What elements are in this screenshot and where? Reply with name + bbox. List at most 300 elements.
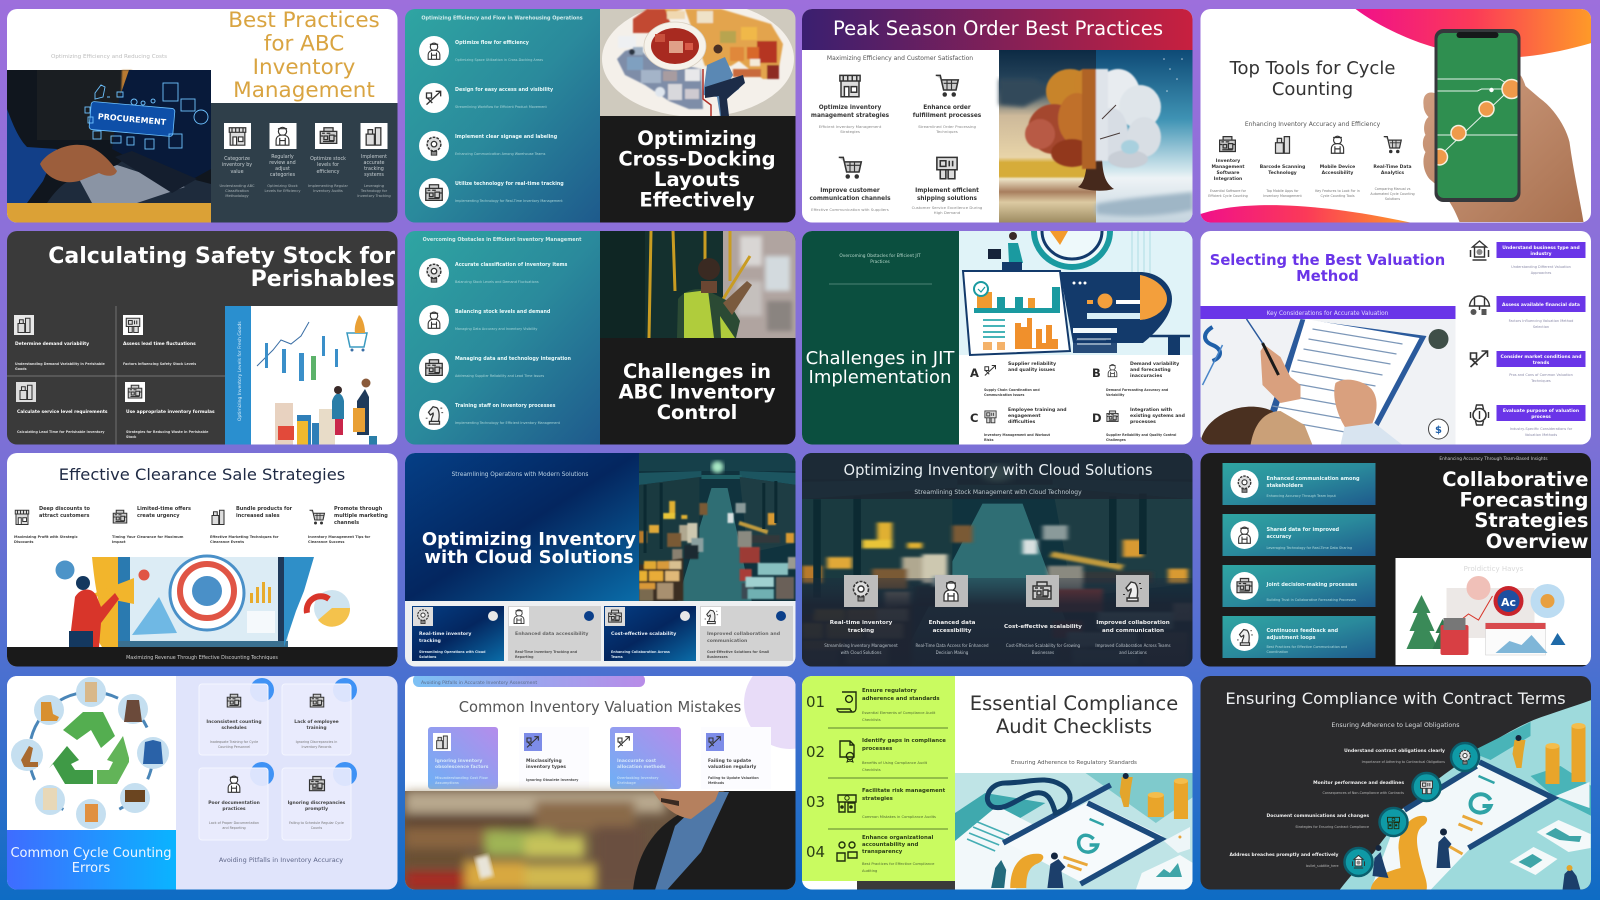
grid of four practices: Strategies bbox=[840, 129, 860, 134]
lime panel: Common Mistakes in Compliance Audits bbox=[862, 815, 936, 819]
photo: procurement laptop bbox=[7, 70, 211, 203]
list: four considerations: Valuation Methods bbox=[1525, 433, 1557, 437]
tools row bbox=[1208, 136, 1415, 201]
cards: four mistakes: Misclassifying bbox=[526, 758, 562, 764]
row of four strategies: Clearance Success bbox=[308, 540, 344, 544]
list: A B C D obstacles: Supplier reliability bbox=[1008, 361, 1056, 367]
panel: four practices bbox=[211, 103, 398, 223]
title: Top Tools for Cycle bbox=[1229, 58, 1395, 79]
illustration: forecasting bbox=[1396, 558, 1592, 665]
slide: Calculating Safety Stock for Perishables bbox=[7, 231, 398, 445]
cards: four mistakes: valuation regularly bbox=[708, 764, 756, 770]
tools row: Top Mobile Apps for bbox=[1265, 189, 1299, 193]
four benefit columns: accessibility bbox=[933, 628, 972, 634]
cards: four errors: promptly bbox=[305, 806, 328, 812]
illustration: marketing target bbox=[56, 556, 350, 647]
panel: title: Effectively bbox=[639, 188, 755, 212]
lime panel bbox=[802, 676, 955, 890]
photo: warehouse background bbox=[802, 453, 1193, 667]
row of four strategies bbox=[14, 506, 388, 544]
cards: four benefits: Improved collaboration and bbox=[707, 631, 780, 637]
list: four collaboration items: adjustment loops bbox=[1266, 635, 1316, 641]
list: A B C D obstacles: and forecasting bbox=[1130, 367, 1171, 373]
footer band bbox=[7, 647, 398, 667]
subtitle: Ensuring Adherence to Legal Obligations bbox=[1331, 722, 1460, 729]
panel: four practices: Optimize stock bbox=[310, 156, 346, 162]
slide: Essential Compliance Audit Checklists bbox=[802, 676, 1193, 890]
row of four strategies: increased sales bbox=[236, 513, 280, 519]
heading strip: Optimizing Efficiency and Flow in Warehousing Operations bbox=[421, 16, 583, 22]
list: four steps: Enhancing Communication Among Warehouse Teams bbox=[455, 152, 546, 156]
illustration: isometric curve bbox=[1340, 700, 1592, 890]
tools row: Barcode Scanning bbox=[1260, 164, 1305, 170]
list: four considerations: Selection bbox=[1533, 325, 1549, 329]
subtitle: Enhancing Accuracy Through Team-Based Insights bbox=[1439, 456, 1548, 462]
four benefit columns: Real-time inventory bbox=[830, 620, 893, 626]
grid lines and four cells: Goods bbox=[15, 367, 27, 371]
grid of four practices: shipping solutions bbox=[917, 196, 978, 202]
grid lines and four cells bbox=[7, 306, 226, 445]
tools row: Technology bbox=[1268, 170, 1297, 176]
top shade band bbox=[802, 453, 1193, 499]
panel: four practices: accurate bbox=[364, 160, 385, 166]
cards: four mistakes: allocation methods bbox=[617, 764, 666, 770]
cards: four mistakes: Methods bbox=[708, 781, 724, 785]
list: four contract steps: Understand contract obligations clearly bbox=[1344, 748, 1445, 754]
grid lines and four cells: Determine demand variability bbox=[15, 341, 89, 347]
panel: four practices: Classification bbox=[225, 189, 249, 193]
four benefit columns: and Locations bbox=[1119, 650, 1147, 655]
slide: Effective Clearance Sale Strategies bbox=[7, 453, 398, 667]
panel: four practices: tracking bbox=[364, 166, 384, 172]
panel: four practices: Categorize bbox=[224, 156, 250, 162]
cards: four mistakes: Misunderstanding Cost Flow bbox=[435, 776, 488, 780]
list: four steps: Implement clear signage and labeling bbox=[455, 134, 558, 140]
title: Ensuring Compliance with Contract Terms bbox=[1225, 689, 1566, 708]
phone with chart bbox=[1432, 29, 1521, 202]
list: four obstacles: Managing data and technology integration bbox=[455, 356, 571, 362]
title: Essential Compliance bbox=[970, 692, 1178, 715]
cards: four mistakes: Assumptions bbox=[435, 781, 459, 785]
list: four considerations: Factors Influencing Valuation Method bbox=[1509, 319, 1573, 323]
photo: four seasons tree bbox=[999, 50, 1193, 223]
title: Strategies bbox=[1474, 509, 1588, 532]
title: Counting bbox=[1272, 79, 1353, 100]
list: A B C D obstacles: D bbox=[1092, 411, 1102, 425]
header band bbox=[802, 9, 1193, 50]
grid of four practices bbox=[809, 75, 983, 215]
lime panel: Best Practices for Effective Compliance bbox=[862, 862, 935, 866]
cards: four errors: practices bbox=[222, 806, 246, 812]
swoosh top bbox=[1356, 9, 1592, 58]
grid of four practices: communication channels bbox=[809, 196, 891, 202]
title: Audit Checklists bbox=[996, 715, 1152, 738]
title: Calculating Safety Stock for bbox=[48, 244, 395, 269]
title: Management bbox=[233, 78, 375, 103]
list: four contract steps: Document communications and changes bbox=[1267, 813, 1369, 819]
list: four collaboration items: Coordination bbox=[1266, 650, 1288, 654]
four benefit columns: Streamlining Inventory Management bbox=[824, 643, 898, 648]
header band: Peak Season Order Best Practices bbox=[833, 17, 1163, 40]
cards: four benefits: Teams bbox=[611, 655, 623, 659]
list: A B C D obstacles: Demand variability bbox=[1130, 361, 1179, 367]
list: four contract steps: Monitor performance and deadlines bbox=[1313, 780, 1404, 786]
list: four steps: Streamlining Workflow for Efficient Product Movement bbox=[455, 105, 547, 109]
list: A B C D obstacles: difficulties bbox=[1008, 419, 1035, 425]
title: Method bbox=[1296, 268, 1359, 285]
list: A B C D obstacles: Demand Forecasting Accuracy and bbox=[1106, 388, 1169, 392]
amber base bar bbox=[7, 203, 211, 223]
grid of four practices: Streamlined Order Processing bbox=[918, 124, 976, 129]
cards: four errors: and Reporting bbox=[222, 826, 246, 830]
green side panel: Overcoming Obstacles for Efficient JIT bbox=[839, 253, 921, 259]
panel: four practices: Inventory Audits bbox=[313, 189, 343, 193]
panel: title: Layouts bbox=[654, 168, 740, 191]
lime panel: 03 bbox=[806, 793, 825, 811]
list: A B C D obstacles: C bbox=[970, 411, 978, 425]
list: four obstacles: Balancing stock levels and demand bbox=[455, 309, 551, 315]
grid of four practices: High Demand bbox=[934, 210, 961, 215]
list: four considerations: Industry-Specific Considerations for bbox=[1510, 427, 1573, 431]
list: four steps: Optimize flow for efficiency bbox=[455, 40, 530, 46]
grid of four practices: management strategies bbox=[811, 113, 890, 119]
list: four contract steps: bullet_subtitle_here bbox=[1306, 864, 1338, 868]
photo: signing document bbox=[1200, 319, 1456, 445]
illustration: recycling ring bbox=[7, 676, 176, 830]
cards: four errors bbox=[199, 684, 351, 840]
tools row: Analytics bbox=[1381, 170, 1404, 176]
list: A B C D obstacles: B bbox=[1092, 366, 1101, 380]
slide: Challenges in JIT Implementation bbox=[802, 231, 1193, 445]
cards: four errors: Failing to Schedule Regular Cycle bbox=[289, 821, 344, 825]
corner circle bbox=[744, 657, 836, 749]
lime panel: processes bbox=[862, 746, 892, 752]
green side panel: Challenges in JIT bbox=[806, 348, 955, 369]
list: four obstacles: Managing Data Accuracy and Inventory Visibility bbox=[455, 327, 537, 331]
tools row: Key Features to Look For in bbox=[1315, 189, 1360, 193]
list: four obstacles: Accurate classification of inventory items bbox=[455, 262, 568, 268]
list: four collaboration items: Enhanced communication among bbox=[1266, 476, 1360, 482]
grid of four practices: Customer Service Excellence During bbox=[912, 205, 983, 210]
title: Inventory bbox=[253, 55, 356, 80]
grid of four practices: Improve customer bbox=[820, 188, 880, 194]
panel: four practices: Leveraging bbox=[364, 184, 384, 188]
photo: warehouse aisle bbox=[639, 453, 796, 601]
green side panel bbox=[802, 231, 959, 445]
list: A B C D obstacles: existing systems and bbox=[1130, 413, 1185, 419]
four benefit columns: Enhanced data bbox=[929, 620, 976, 626]
grid of four practices: Techniques bbox=[935, 129, 958, 134]
list: four collaboration items: Enhancing Accuracy Through Team Input bbox=[1266, 494, 1337, 498]
cards: four benefits: Businesses bbox=[707, 655, 728, 659]
cards: four benefits: Real-time inventory bbox=[419, 631, 471, 637]
hero gradient with title bbox=[405, 453, 639, 601]
grid of four practices: Enhance order bbox=[923, 105, 971, 111]
panel: title: Challenges in bbox=[623, 360, 771, 383]
subtitle: Ensuring Adherence to Regulatory Standards bbox=[1011, 760, 1137, 766]
title: Optimizing Inventory with Cloud Solutions bbox=[844, 462, 1152, 479]
hero gradient with title: with Cloud Solutions bbox=[424, 547, 634, 568]
title: Overview bbox=[1486, 530, 1588, 553]
lime panel: Checklists bbox=[862, 768, 881, 772]
cards: four errors: training bbox=[306, 725, 327, 731]
tools row: Solutions bbox=[1385, 197, 1400, 201]
subtitle: Streamlining Stock Management with Cloud Technology bbox=[914, 489, 1082, 496]
four benefit columns bbox=[824, 575, 1171, 655]
four benefit columns: Improved Collaboration Across Teams bbox=[1095, 643, 1171, 648]
row of four strategies: Effective Marketing Techniques for bbox=[210, 535, 279, 539]
cards: four mistakes: Shrinkage bbox=[617, 781, 637, 785]
lime panel: Essential Elements of Compliance Audit bbox=[862, 711, 936, 715]
green side panel: Implementation bbox=[809, 367, 951, 388]
list: A B C D obstacles: Communication Issues bbox=[984, 393, 1024, 397]
cards: four benefits: Enhancing Collaboration Across bbox=[611, 650, 670, 654]
list: four considerations: Techniques bbox=[1530, 379, 1551, 383]
tools row: Cycle Counting Tools bbox=[1320, 194, 1355, 198]
lime panel: Facilitate risk management bbox=[862, 788, 946, 794]
cards: four mistakes: Failing to Update Valuation bbox=[708, 776, 759, 780]
title: Selecting the Best Valuation bbox=[1210, 252, 1445, 269]
panel: four practices: Levels for Efficiency bbox=[265, 189, 301, 193]
row of four strategies: attract customers bbox=[39, 513, 89, 519]
cards: four errors: Lack of employee bbox=[294, 719, 339, 725]
cards: four benefits: tracking bbox=[419, 638, 441, 644]
list: four collaboration items: Leveraging Technology for Real-Time Data Sharing bbox=[1266, 546, 1352, 550]
list: four steps: Implementing Technology for Real-Time Inventory Management bbox=[455, 199, 563, 203]
lime panel: Identify gaps in compliance bbox=[862, 738, 946, 744]
hero gradient with title: Optimizing Inventory bbox=[422, 529, 636, 550]
cards: four mistakes: Failing to update bbox=[708, 758, 751, 764]
lime panel: accountability and bbox=[862, 842, 918, 848]
photo: warehouse worker bbox=[600, 231, 796, 338]
pill label bbox=[413, 674, 645, 687]
title: Effective Clearance Sale Strategies bbox=[59, 465, 345, 484]
tools row: Inventory Management bbox=[1263, 194, 1302, 198]
panel: four practices: Understanding ABC bbox=[220, 184, 255, 188]
list: A B C D obstacles: Supplier Reliability and Quality Control bbox=[1106, 433, 1176, 437]
grid of four practices: Effective Communication with Suppliers bbox=[811, 207, 889, 212]
cards: four benefits: communication bbox=[707, 638, 747, 644]
grid of four practices: fulfillment processes bbox=[913, 113, 982, 119]
row of four strategies: Promote through bbox=[334, 506, 383, 512]
heading strip: Overcoming Obstacles in Efficient Inventory Management bbox=[423, 237, 582, 243]
tools row: Integration bbox=[1214, 176, 1242, 182]
panel: four practices: Implement bbox=[361, 154, 387, 160]
tools row: Real-Time Data bbox=[1373, 164, 1412, 170]
list: four collaboration items: Continuous feedback and bbox=[1266, 628, 1339, 634]
four benefit columns: Real-Time Data Access for Enhanced bbox=[915, 643, 989, 648]
list: four considerations: trends bbox=[1533, 360, 1550, 366]
slide: Ensuring Compliance with Contract Terms bbox=[1200, 676, 1592, 890]
photo: plate of blocks bbox=[600, 1, 796, 117]
row of four strategies: Timing Your Clearance for Maximum bbox=[112, 535, 184, 539]
panel: four practices: Regularly bbox=[271, 154, 294, 160]
list: four obstacles bbox=[419, 258, 571, 430]
illustration: dashboard bbox=[959, 231, 1193, 355]
blue strip with vertical label: Optimizing Inventory Levels for Fresh Goods bbox=[237, 321, 243, 421]
list: four steps bbox=[419, 36, 564, 208]
row of four strategies: Discounts bbox=[14, 540, 33, 544]
list: four collaboration items bbox=[1222, 463, 1376, 658]
title: Common Inventory Valuation Mistakes bbox=[459, 699, 741, 716]
tools row: Comparing Manual vs bbox=[1375, 187, 1411, 191]
bottom shade band bbox=[802, 578, 1193, 667]
list: four steps: Utilize technology for real-time tracking bbox=[455, 181, 564, 187]
cards: four benefits: Reporting bbox=[515, 655, 534, 659]
list: four considerations: Consider market conditions and bbox=[1501, 354, 1581, 360]
list: four obstacles: Implementing Technology for Efficient Inventory Management bbox=[455, 421, 561, 425]
lime panel: 02 bbox=[806, 743, 825, 761]
cards: four mistakes: obsolescence factors bbox=[435, 764, 489, 770]
illustration: grocery chart bbox=[251, 306, 398, 445]
grid lines and four cells: Strategies for Reducing Waste in Perishable bbox=[126, 430, 209, 434]
list: four contract steps: Strategies for Ensuring Contract Compliance bbox=[1295, 825, 1369, 829]
grid of four practices: Efficient Inventory Management bbox=[819, 124, 882, 129]
cards: four mistakes bbox=[428, 727, 771, 789]
cards: four benefits: Streamlining Operations with Cloud bbox=[419, 650, 486, 654]
cards: four errors: Inadequate Training for Cycle bbox=[210, 740, 258, 744]
list: four collaboration items: Joint decision-making processes bbox=[1266, 582, 1357, 588]
illustration: forecasting: Ac bbox=[1501, 596, 1516, 609]
tools row: Mobile Device bbox=[1320, 164, 1355, 170]
title: Collaborative bbox=[1442, 468, 1588, 491]
list: A B C D obstacles: Variability bbox=[1106, 393, 1125, 397]
subtitle: Optimizing Efficiency and Reducing Costs bbox=[51, 54, 167, 60]
list: four contract steps: Address breaches promptly and effectively bbox=[1229, 852, 1339, 858]
illustration: forecasting: Proldicticy Havys bbox=[1464, 565, 1524, 573]
panel: title: Common Cycle Counting bbox=[10, 846, 172, 861]
panel: four practices: review and bbox=[269, 160, 296, 166]
list: A B C D obstacles: Integration with bbox=[1130, 407, 1172, 413]
title: for ABC bbox=[264, 32, 344, 56]
panel: four practices: value bbox=[230, 169, 244, 175]
cards: four benefits: Cost-effective scalability bbox=[611, 631, 676, 637]
list: A B C D obstacles: inaccuracies bbox=[1130, 373, 1162, 379]
lime panel: Checklists bbox=[862, 718, 881, 722]
grid lines and four cells: Assess lead time fluctuations bbox=[123, 341, 196, 347]
lime panel: Ensure regulatory bbox=[862, 688, 917, 694]
list: A B C D obstacles: Inventory Management and Workout bbox=[984, 433, 1050, 437]
panel: title: ABC Inventory bbox=[618, 380, 776, 404]
panel: title: Control bbox=[657, 401, 737, 424]
cards: four errors: Inconsistent counting bbox=[206, 719, 262, 725]
cards: four errors: Ignoring discrepancies bbox=[288, 800, 346, 806]
cards: four mistakes: Inaccurate cost bbox=[617, 758, 657, 764]
row of four strategies: Deep discounts to bbox=[39, 506, 91, 512]
pill label: Avoiding Pitfalls in Accurate Inventory Assessment bbox=[421, 680, 537, 686]
photo: procurement laptop: PROCUREMENT bbox=[97, 112, 167, 127]
list: four considerations: Assess available financial data bbox=[1502, 302, 1580, 308]
lime panel: 04 bbox=[806, 843, 825, 861]
list: four steps: Optimizing Space Utilization in Cross-Docking Areas bbox=[455, 58, 543, 62]
row of four strategies: Impact bbox=[112, 540, 126, 544]
cards: four benefits bbox=[412, 606, 793, 661]
list: A B C D obstacles: Supply Chain Coordination and bbox=[984, 388, 1040, 392]
cards: four mistakes: Ignoring Obsolete Inventory bbox=[526, 778, 579, 782]
green side panel: Practices bbox=[870, 259, 890, 265]
four benefit columns: with Cloud Solutions bbox=[841, 650, 881, 655]
footer band: Maximizing Revenue Through Effective Discounting Techniques bbox=[126, 655, 278, 661]
panel: four practices: inventory by bbox=[222, 162, 252, 168]
lime panel: transparency bbox=[862, 849, 903, 855]
cards: four benefits: Enhanced data accessibility bbox=[515, 631, 588, 637]
list: four contract steps: Consequences of Non-Compliance with Contracts bbox=[1323, 791, 1404, 795]
grid of four practices: Implement efficient bbox=[915, 188, 979, 194]
panel: four practices: Methodology bbox=[225, 194, 250, 198]
list: A B C D obstacles: engagement bbox=[1008, 413, 1041, 419]
caption: Avoiding Pitfalls in Inventory Accuracy bbox=[219, 856, 343, 864]
four benefit columns: Improved collaboration bbox=[1096, 620, 1170, 626]
photo: man in grocery aisle bbox=[405, 791, 796, 890]
four benefit columns: and communication bbox=[1102, 628, 1164, 634]
subtitle: Maximizing Efficiency and Customer Satisfaction bbox=[827, 55, 973, 62]
lime panel: adherence and standards bbox=[862, 696, 940, 702]
cards: four mistakes: Ignoring inventory bbox=[435, 758, 482, 764]
list: four considerations: process bbox=[1531, 414, 1551, 420]
title: Perishables bbox=[251, 267, 395, 292]
grid lines and four cells: Stock bbox=[126, 435, 137, 439]
list: four collaboration items: Shared data for improved bbox=[1266, 527, 1340, 533]
cards: four mistakes: Overlooking Inventory bbox=[617, 776, 659, 780]
panel: four practices: levels for bbox=[317, 162, 339, 168]
slide: Collaborative Forecasting Strategies Overview bbox=[1200, 453, 1592, 666]
row of four strategies: Maximizing Profit with Strategic bbox=[14, 535, 78, 539]
panel: title: Cross-Docking bbox=[618, 148, 776, 170]
purple bar bbox=[1200, 306, 1456, 319]
panel: title: Optimizing bbox=[637, 127, 757, 150]
panel: title bbox=[7, 830, 176, 890]
tools row: Efficient Cycle Counting bbox=[1208, 194, 1248, 198]
list: A B C D obstacles: and quality issues bbox=[1008, 367, 1055, 373]
row of four strategies: create urgency bbox=[137, 513, 180, 519]
list: four considerations bbox=[1470, 241, 1586, 437]
grid lines and four cells: Calculating Lead Time for Perishable Inventory bbox=[17, 430, 105, 434]
tools row: Accessibility bbox=[1322, 170, 1353, 176]
panel: four practices: efficiency bbox=[316, 169, 340, 175]
cards: four errors: Ignoring Discrepancies in bbox=[296, 740, 337, 744]
slide: Peak Season Order Best Practices bbox=[802, 9, 1193, 223]
list: four considerations: Approaches bbox=[1531, 271, 1551, 275]
row of four strategies: Bundle products for bbox=[236, 506, 293, 512]
panel: title: Errors bbox=[72, 861, 110, 876]
panel: four practices: Optimizing Stock bbox=[267, 184, 299, 188]
slide: Optimizing Cross-Docking Layouts Effectively bbox=[405, 1, 796, 223]
grid lines and four cells: Factors Influencing Safety Stock Levels bbox=[123, 362, 196, 366]
row of four strategies: Clearance Events bbox=[210, 540, 244, 544]
panel: four practices: adjust bbox=[275, 166, 290, 172]
list: four considerations: Understanding Different Valuation bbox=[1511, 265, 1571, 269]
cards: four errors: Counting Personnel bbox=[218, 745, 250, 749]
list: A B C D obstacles: A bbox=[970, 366, 979, 380]
cards: four benefits: Real-Time Inventory Tracking and bbox=[515, 650, 578, 654]
slide: Challenges in ABC Inventory Control bbox=[405, 231, 796, 445]
tools row: Automated Cycle Counting bbox=[1370, 192, 1415, 196]
panel: four practices: categories bbox=[270, 172, 296, 178]
subtitle: Enhancing Inventory Accuracy and Efficiency bbox=[1245, 121, 1381, 128]
slide: Top Tools for Cycle Counting bbox=[1200, 9, 1592, 223]
list: A B C D obstacles: Challenges bbox=[1106, 438, 1126, 442]
list: four collaboration items: Building Trust in Collaborative Forecasting Processes bbox=[1266, 598, 1356, 602]
list: four considerations: Evaluate purpose of valuation bbox=[1503, 408, 1579, 414]
grid of four practices: Optimize inventory bbox=[819, 105, 881, 111]
cards: four errors: schedules bbox=[221, 725, 247, 731]
photo: hand bbox=[1423, 70, 1584, 222]
cards: four errors: Poor documentation bbox=[208, 800, 260, 806]
title: Best Practices bbox=[228, 8, 380, 33]
lime panel: strategies bbox=[862, 796, 893, 802]
lime panel: Enhance organizational bbox=[862, 835, 933, 841]
tools row: Software bbox=[1217, 170, 1239, 176]
